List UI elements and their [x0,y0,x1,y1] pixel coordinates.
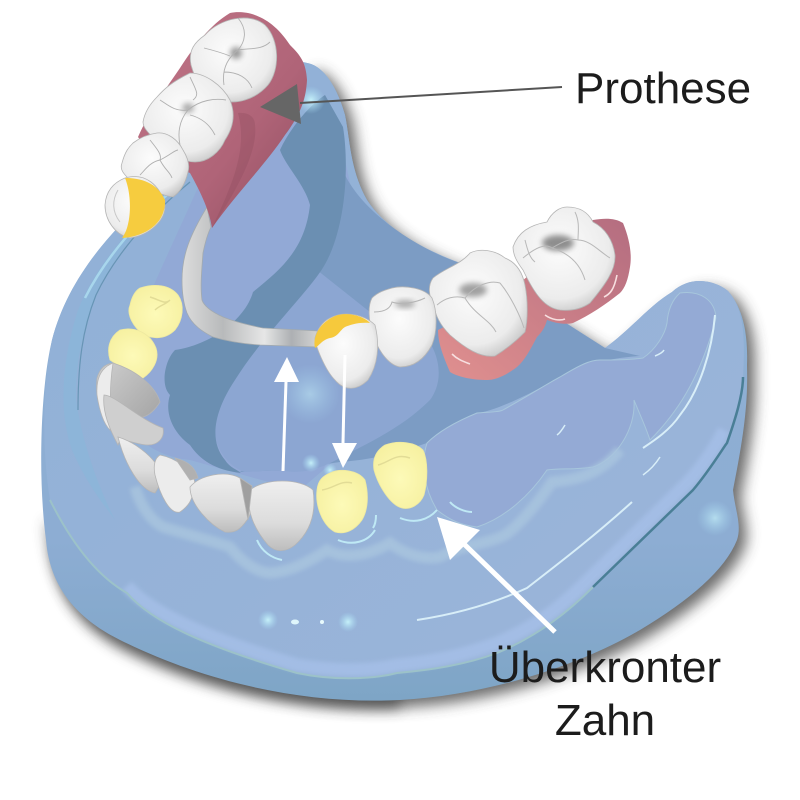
premolar: upper front [121,133,189,197]
premolar: lower right [369,287,436,367]
lingual periwinkle area [125,120,380,490]
drop shadow [46,70,755,708]
arrow: prothese pointer [260,84,562,124]
label: Zahn: Zahn [555,696,655,745]
upper surface [44,62,744,678]
rim line [50,500,593,678]
molar: lower right back [513,207,615,310]
arrow: crowned tooth pointer [437,517,555,632]
clasp tooth with gold cap [314,314,378,388]
molar: upper back [190,18,277,102]
crown with gold cap left [105,177,165,238]
gum right [438,219,631,380]
lighter palate lobe [213,270,439,472]
gum left [138,12,307,228]
arrows: white movement arrows [274,355,555,632]
label: Prothese: Prothese [575,64,751,113]
dark lingual band [165,95,346,473]
right palate [240,175,640,472]
left wall band [63,172,196,520]
yellow crown fissures [150,297,410,490]
metal clasp bar [182,207,319,347]
panel: partial denture [105,12,631,388]
label: Überkronter: Überkronter [489,643,721,692]
scalloped band under teeth [135,450,620,573]
panel: natural front teeth [97,363,314,551]
molar: upper middle [143,73,233,162]
palate glow [280,364,340,424]
sparkle glows [297,86,325,114]
light band above rim [127,430,724,670]
arrow: up [274,357,299,471]
panel: jaw base [41,62,747,701]
molar: lower right middle [429,250,527,356]
arrow: down [332,355,357,468]
right ridge [424,292,716,527]
highlight lines [643,315,715,448]
panel: yellow crowned stumps [109,285,427,533]
